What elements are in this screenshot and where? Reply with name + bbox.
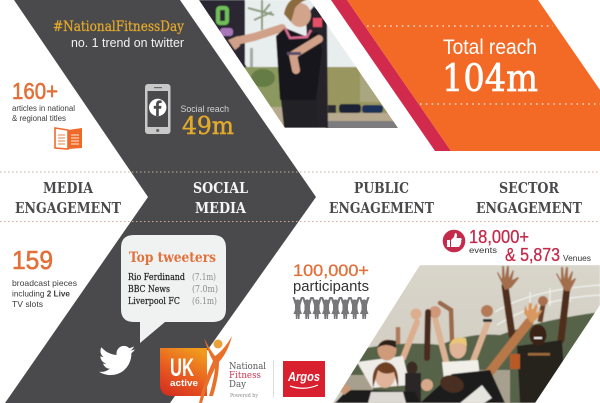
stat: broadcast pieces: broadcast pieces	[12, 278, 77, 288]
callout: top tweeters: BBC News	[128, 285, 170, 295]
photo: fitness instructor	[195, 0, 405, 130]
text: national fitness day	[229, 362, 266, 399]
stat: broadcast pieces: 159	[12, 245, 53, 275]
heading: sector engagement: SECTOR	[499, 179, 559, 197]
callout: top tweeters: Liverpool FC	[128, 297, 180, 307]
heading: media engagement	[15, 179, 122, 217]
stat: participants	[293, 261, 369, 295]
text: total reach label: Total reach	[443, 36, 537, 59]
icon: phone with facebook	[145, 84, 170, 134]
callout: top tweeters: Rio Ferdinand	[128, 273, 185, 283]
stat: social reach: 49m	[182, 112, 234, 140]
heading: social media: MEDIA	[195, 199, 246, 217]
logo: Argos	[283, 361, 325, 397]
text: twitter trend: no. 1 trend on twitter	[71, 35, 185, 50]
callout: top tweeters: (6.1m)	[192, 296, 217, 307]
heading: social media: SOCIAL	[193, 179, 248, 197]
heading: social media	[193, 179, 248, 217]
heading: media engagement: ENGAGEMENT	[15, 199, 122, 217]
heading: sector engagement	[476, 179, 583, 217]
text: national fitness day: Powered by	[230, 393, 259, 399]
callout: top tweeters	[121, 235, 226, 343]
heading: media engagement: MEDIA	[43, 179, 93, 197]
icon: thumbs up	[443, 230, 465, 252]
stat: social reach: Social reach	[180, 104, 229, 115]
heading: public engagement: PUBLIC	[354, 179, 409, 197]
logo: UK active: UK	[170, 354, 194, 382]
stat: participants: 100,000+	[293, 261, 369, 280]
logo: Argos: Argos	[287, 369, 320, 384]
panel: total reach	[331, 0, 600, 151]
stat: articles: 160+	[12, 78, 58, 104]
text: hashtag heading: #NationalFitnessDay	[53, 19, 184, 35]
heading: sector engagement: ENGAGEMENT	[476, 199, 583, 217]
stat: articles	[12, 78, 75, 123]
stat: participants: participants	[293, 279, 369, 295]
callout: top tweeters: (7.1m)	[192, 272, 216, 283]
text: total reach value: 104m	[442, 57, 538, 100]
stat: events and venues: events	[469, 245, 497, 255]
stat: broadcast pieces	[12, 245, 77, 309]
logo: UK active	[160, 336, 232, 403]
heading: public engagement: ENGAGEMENT	[329, 199, 435, 217]
icon: twitter bird	[99, 346, 135, 375]
callout: top tweeters: Top tweeters	[129, 250, 216, 266]
panel: grey chevron	[5, 0, 316, 403]
stat: broadcast pieces: TV slots	[12, 299, 43, 309]
divider: dotted top	[0, 171, 600, 173]
stat: broadcast pieces: including 2 Live	[12, 288, 70, 298]
stat: events and venues: & 5,873	[505, 245, 560, 265]
stat: events and venues: Venues	[563, 253, 591, 263]
icon: row of people	[292, 297, 370, 319]
callout: top tweeters: (7.0m)	[192, 284, 218, 295]
stat: events and venues: 18,000+	[469, 227, 529, 247]
stat: events and venues	[469, 227, 591, 265]
heading: public engagement	[329, 179, 435, 217]
icon: open book	[55, 128, 82, 149]
text: national fitness day: National	[229, 362, 266, 372]
text: national fitness day: Day	[229, 380, 247, 390]
stat: articles: articles in national	[12, 104, 75, 113]
stat: articles: & regional titles	[12, 114, 66, 123]
photo: group of people cheering	[330, 265, 600, 403]
logo: UK active: active	[170, 378, 198, 389]
text: national fitness day: Fitness	[229, 371, 261, 381]
